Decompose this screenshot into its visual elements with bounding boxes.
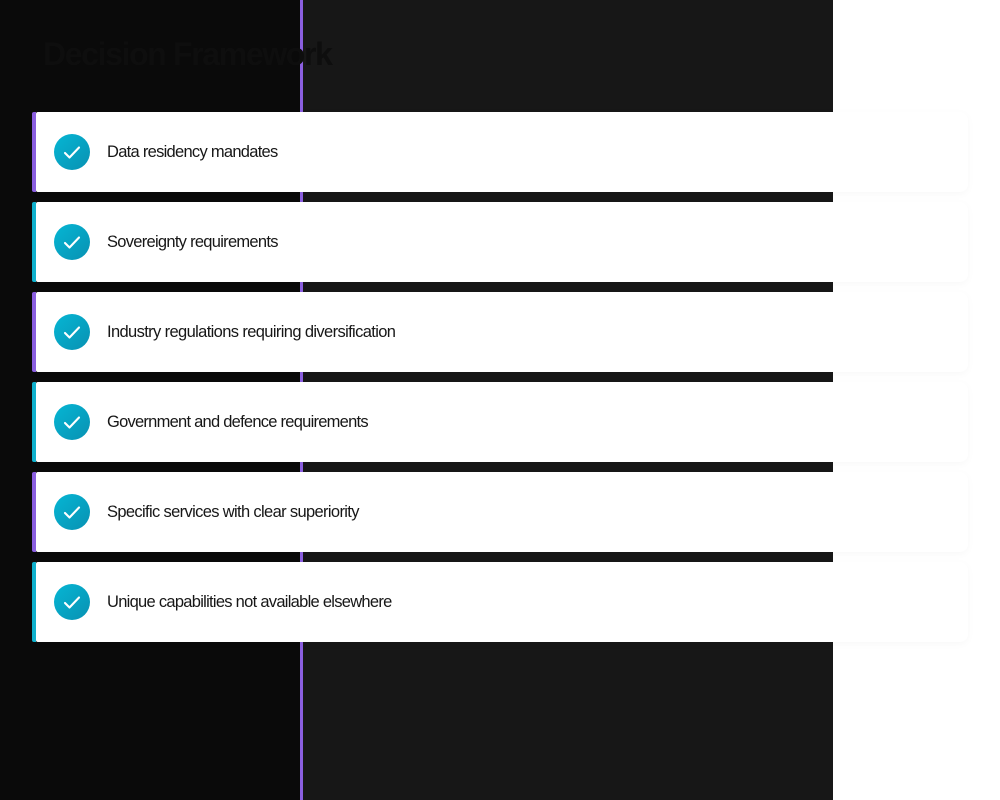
label: Specific services with clear superiority [107, 503, 359, 521]
card: industry regulations [32, 292, 833, 372]
label: Sovereignty requirements [107, 233, 278, 251]
vertical purple line [300, 0, 303, 800]
title: Decision Framework [43, 36, 332, 72]
card: sovereignty requirements [32, 202, 833, 282]
card: data residency mandates [32, 112, 833, 192]
background: dark right column [303, 0, 833, 800]
icon: check [54, 224, 90, 260]
icon: check [54, 314, 90, 350]
icon: check [54, 584, 90, 620]
background: dark left column [0, 0, 300, 800]
label: Government and defence requirements [107, 413, 368, 431]
label: Unique capabilities not available elsewhere [107, 593, 392, 611]
card: specific services [32, 472, 833, 552]
icon: check [54, 404, 90, 440]
label: Industry regulations requiring diversification [107, 323, 395, 341]
card: unique capabilities [32, 562, 833, 642]
label: Data residency mandates [107, 143, 278, 161]
card: government and defence [32, 382, 833, 462]
icon: check [54, 134, 90, 170]
icon: check [54, 494, 90, 530]
